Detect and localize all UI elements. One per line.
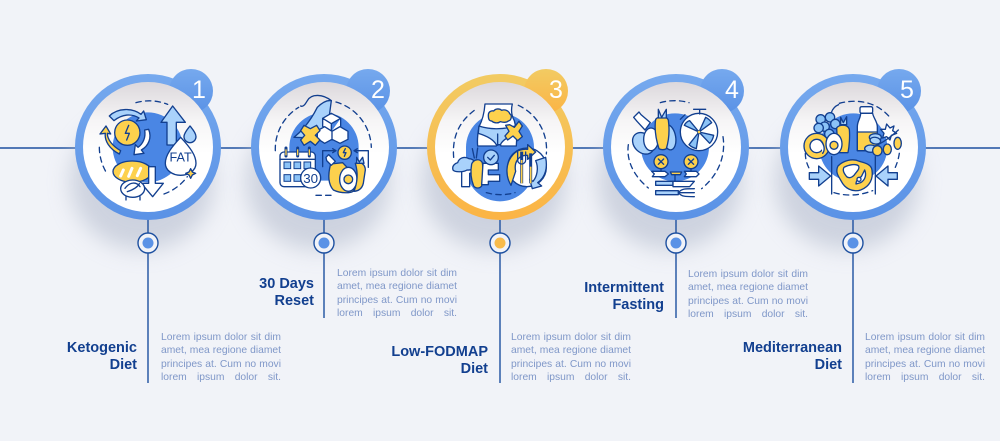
heading: Mediterranean Diet: Diet	[815, 357, 842, 373]
number 5: 5	[900, 76, 914, 104]
text block: Intermittent Fasting description	[688, 269, 808, 320]
badge 5	[877, 69, 921, 113]
heading: Ketogenic Diet: Ketogenic	[67, 340, 137, 356]
heading: Low-FODMAP Diet: Low-FODMAP	[391, 344, 488, 360]
badge 4	[700, 69, 744, 113]
badge 3	[524, 69, 568, 113]
number 2: 2	[371, 76, 385, 104]
step 3 circle: low-fodmap diet	[422, 69, 573, 383]
icon: 30 days reset	[275, 95, 371, 195]
step 2 circle: 30 days reset	[246, 69, 397, 318]
horizontal timeline line	[0, 147, 1000, 149]
node 1	[138, 233, 158, 253]
text block: Low-FODMAP Diet description: principes at. Cum no movi	[511, 359, 631, 370]
number 1: 1	[192, 76, 206, 104]
text block: Mediterranean Diet description: lorem ipsum dolor sit.	[865, 372, 985, 383]
step 4 circle: intermittent fasting	[598, 69, 749, 318]
text block: Low-FODMAP Diet description: Lorem ipsum dolor sit dim	[511, 332, 631, 343]
icon: keto: FAT	[170, 151, 192, 165]
text block: 30 Days Reset description	[337, 268, 457, 319]
text block: Mediterranean Diet description: Lorem ipsum dolor sit dim	[865, 332, 985, 343]
heading: 30 Days Reset: 30 Days	[259, 276, 314, 292]
heading: Ketogenic Diet	[67, 340, 137, 373]
text block: Mediterranean Diet description: principes at. Cum no movi	[865, 359, 985, 370]
text block: 30 Days Reset description: amet, mea regione diamet	[337, 281, 457, 292]
node 3	[490, 233, 510, 253]
panel text: intermittent fasting	[584, 269, 808, 320]
text block: Ketogenic Diet description: lorem ipsum dolor sit.	[161, 372, 281, 383]
text block: Intermittent Fasting description: amet, mea regione diamet	[688, 282, 808, 293]
node 4	[666, 233, 686, 253]
text block: Ketogenic Diet description: amet, mea regione diamet	[161, 345, 281, 356]
text block: Mediterranean Diet description	[865, 332, 985, 383]
badge 1	[169, 69, 213, 113]
heading: Low-FODMAP Diet	[391, 344, 488, 377]
text block: Mediterranean Diet description: amet, mea regione diamet	[865, 345, 985, 356]
text block: Low-FODMAP Diet description: lorem ipsum dolor sit.	[511, 372, 631, 383]
badge 2	[346, 69, 390, 113]
heading: 30 Days Reset: Reset	[274, 293, 314, 309]
panel text: 30 days reset	[259, 268, 457, 319]
panel text: low-fodmap diet	[391, 332, 631, 383]
node 5	[843, 233, 863, 253]
heading: Ketogenic Diet: Diet	[110, 357, 137, 373]
text block: Intermittent Fasting description: lorem ipsum dolor sit.	[688, 309, 808, 320]
text block: Low-FODMAP Diet description	[511, 332, 631, 383]
heading: Intermittent Fasting: Fasting	[612, 297, 664, 313]
heading: Mediterranean Diet: Mediterranean	[743, 340, 842, 356]
step 5 circle: mediterranean diet	[775, 69, 926, 383]
heading: Low-FODMAP Diet: Diet	[461, 361, 488, 377]
text block: Ketogenic Diet description: Lorem ipsum dolor sit dim	[161, 332, 281, 343]
step 1 circle: ketogenic diet	[70, 69, 221, 383]
icon: keto	[99, 101, 196, 200]
text block: Intermittent Fasting description: Lorem ipsum dolor sit dim	[688, 269, 808, 280]
text block: Low-FODMAP Diet description: amet, mea regione diamet	[511, 345, 631, 356]
heading: 30 Days Reset	[259, 276, 314, 309]
node 2	[314, 233, 334, 253]
icon: low fodmap	[453, 104, 547, 201]
icon: 30 days reset: 30	[303, 171, 318, 186]
heading: Intermittent Fasting: Intermittent	[584, 280, 664, 296]
text block: Ketogenic Diet description	[161, 332, 281, 383]
panel text: mediterranean diet	[743, 332, 985, 383]
number 4: 4	[725, 76, 739, 104]
text block: 30 Days Reset description: principes at. Cum no movi	[337, 295, 457, 306]
icon: fasting	[628, 101, 724, 197]
heading: Intermittent Fasting	[584, 280, 664, 313]
panel text: ketogenic diet	[67, 332, 281, 383]
text block: 30 Days Reset description: lorem ipsum dolor sit.	[337, 308, 457, 319]
icon: mediterranean	[804, 101, 901, 195]
number 3: 3	[549, 76, 563, 104]
text block: 30 Days Reset description: Lorem ipsum dolor sit dim	[337, 268, 457, 279]
text block: Intermittent Fasting description: principes at. Cum no movi	[688, 296, 808, 307]
heading: Mediterranean Diet	[743, 340, 842, 373]
text block: Ketogenic Diet description: principes at. Cum no movi	[161, 359, 281, 370]
